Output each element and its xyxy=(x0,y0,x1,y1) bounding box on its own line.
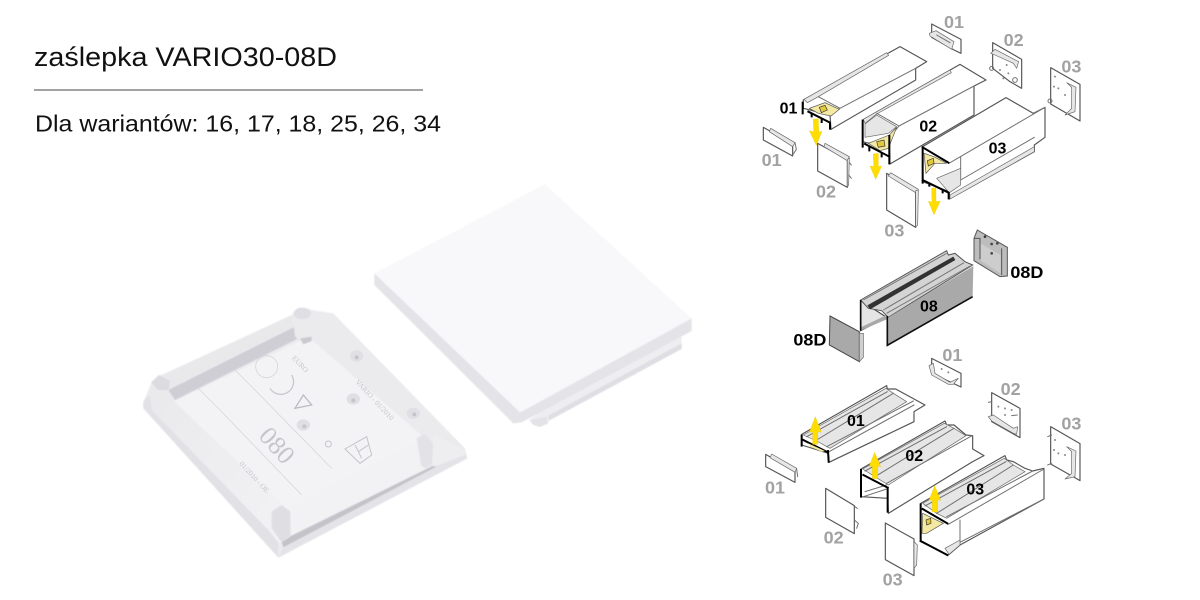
arrow 02 xyxy=(870,153,882,179)
photo: open end cap, inner side xyxy=(143,308,467,558)
cap back 02 xyxy=(988,393,1020,438)
arrow 01 xyxy=(809,417,821,444)
cap front 02 xyxy=(818,143,851,187)
profile 02 xyxy=(863,64,986,164)
labels top: 02 xyxy=(816,181,836,201)
labels top: 01 xyxy=(780,100,798,117)
labels top: 01 xyxy=(944,12,964,32)
cap front 02 xyxy=(826,488,858,534)
embossed marks: 01/2010 - OE xyxy=(238,459,272,495)
labels bottom: 02 xyxy=(1001,379,1021,399)
labels top: 03 xyxy=(989,140,1007,157)
labels middle: 08 xyxy=(920,298,938,315)
cap back 01 xyxy=(929,24,961,53)
labels top: 02 xyxy=(919,118,937,135)
embossed marks: VARIO - 01/2010 xyxy=(354,378,396,422)
labels bottom: 03 xyxy=(966,482,984,499)
shadow band xyxy=(282,466,437,547)
base plate xyxy=(143,308,467,558)
upper wall top xyxy=(162,315,295,392)
labels bottom: 03 xyxy=(883,570,903,590)
cap back 03 xyxy=(1048,427,1080,481)
title: zaślepka VARIO30-08D xyxy=(34,42,337,72)
labels middle: 08D xyxy=(793,331,826,350)
edge xyxy=(374,273,692,423)
peg xyxy=(530,417,548,427)
cap front 03 xyxy=(885,523,917,576)
labels middle: 08D xyxy=(1010,263,1043,282)
cap front 01 xyxy=(766,454,798,482)
front corner posts xyxy=(417,434,433,468)
diagram: bottom assembly xyxy=(766,358,1080,576)
cap back 03 xyxy=(1048,68,1080,121)
cap back 02 xyxy=(990,43,1022,88)
profile 03 xyxy=(923,98,1045,199)
arrow 03 xyxy=(929,486,941,512)
cap 08D left xyxy=(829,316,863,362)
inner floor xyxy=(173,337,425,510)
labels bottom: 01 xyxy=(765,477,785,497)
cap front 03 xyxy=(887,173,918,227)
embossed marks xyxy=(198,350,420,495)
arrow 02 xyxy=(869,452,881,479)
labels bottom: 03 xyxy=(1061,413,1081,433)
right plate xyxy=(433,435,465,467)
labels top: 03 xyxy=(1061,57,1081,77)
labels bottom: 02 xyxy=(824,527,844,547)
profile 01 xyxy=(802,386,925,462)
profile 01 xyxy=(803,47,927,129)
photo: end cap, outer side xyxy=(374,184,692,427)
left wall xyxy=(150,385,290,543)
labels bottom: 02 xyxy=(905,448,923,465)
labels bottom: 01 xyxy=(847,413,865,430)
diagram: top assembly xyxy=(763,24,1080,227)
labels top xyxy=(762,12,1081,241)
upper wall inner face xyxy=(168,327,298,400)
labels bottom xyxy=(765,345,1081,590)
labels top: 03 xyxy=(884,221,904,241)
arrow 01 xyxy=(809,119,822,145)
embossed marks: EURO xyxy=(290,354,310,374)
labels bottom: 01 xyxy=(942,345,962,365)
diagram: middle assembly xyxy=(829,230,1007,362)
profile 08 xyxy=(861,251,973,345)
labels middle xyxy=(793,263,1043,350)
title rule xyxy=(34,90,423,91)
post rear xyxy=(292,308,312,343)
labels top: 02 xyxy=(1004,30,1024,50)
variants text: Dla wariantów: 16, 17, 18, 25, 26, 34 xyxy=(35,110,441,136)
profile 02 xyxy=(861,421,984,513)
embossed marks: 080 xyxy=(253,421,301,470)
cap back 01 xyxy=(929,358,961,387)
profile 03 xyxy=(921,456,1044,555)
cap front 01 xyxy=(763,127,796,156)
labels top: 01 xyxy=(762,150,782,170)
lip xyxy=(529,335,682,427)
left corner post xyxy=(151,375,170,390)
cap 08D right xyxy=(974,230,1007,277)
top face xyxy=(374,184,692,412)
arrow 03 xyxy=(928,188,940,215)
front wall xyxy=(288,442,433,537)
